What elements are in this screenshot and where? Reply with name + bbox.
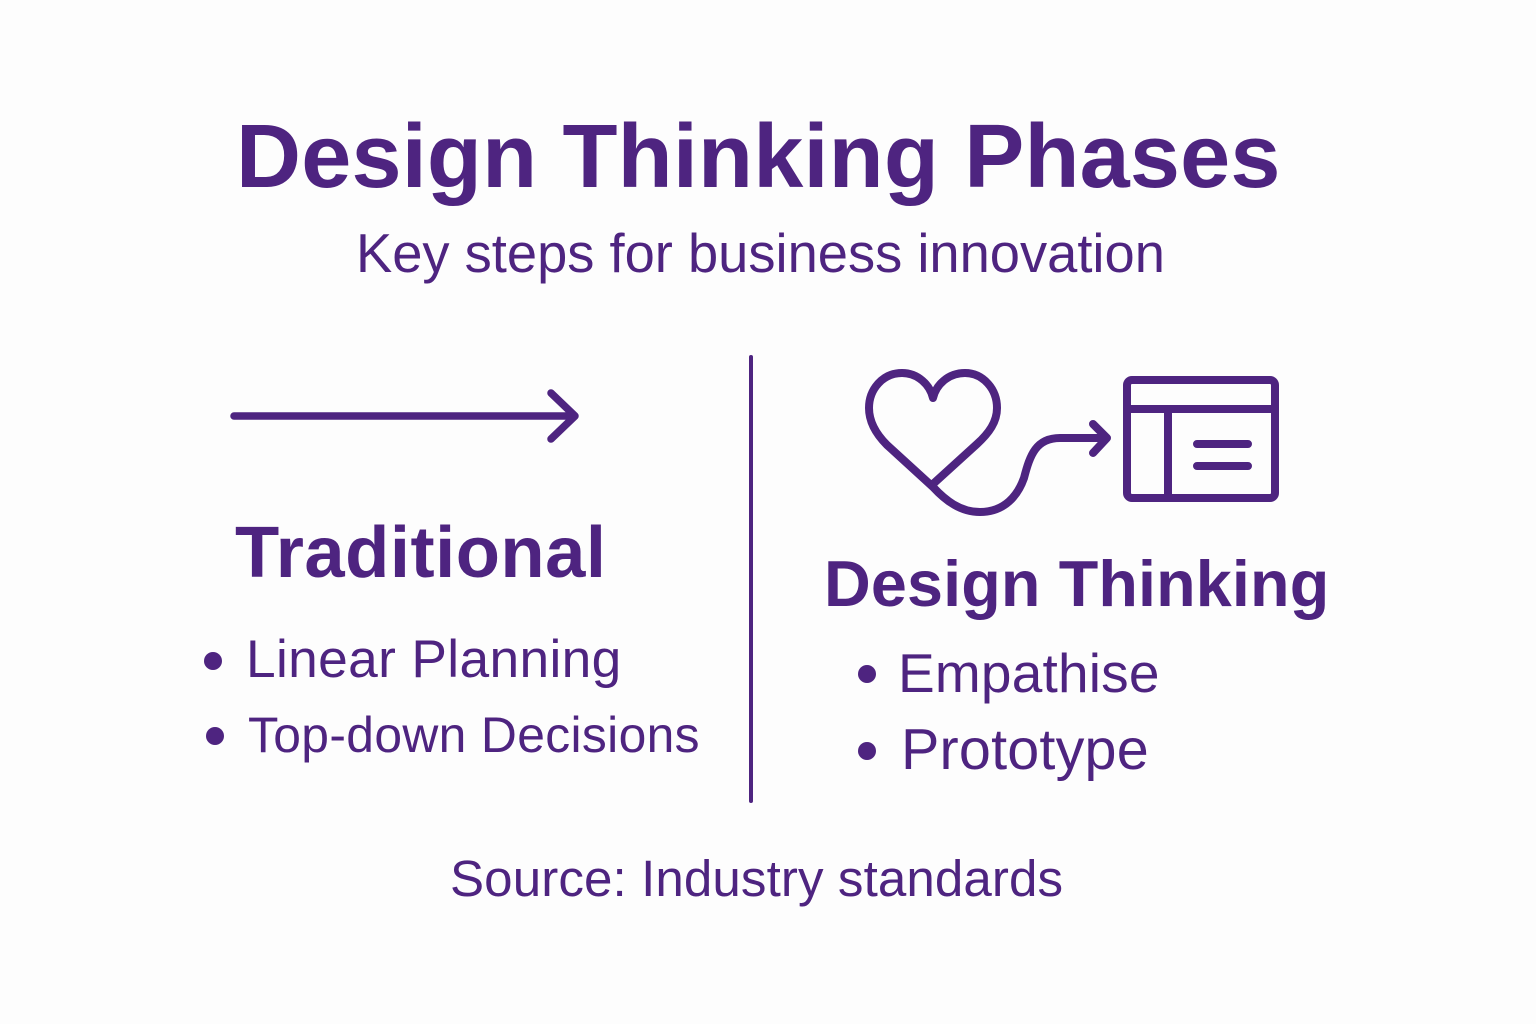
wireframe window: [1127, 380, 1275, 498]
icon: heart to prototype: [865, 369, 1279, 516]
bullet: prototype: Prototype: [901, 718, 1149, 782]
subtitle: Key steps for business innovation: [356, 223, 1165, 284]
bullet: top-down decisions: Top-down Decisions: [248, 707, 700, 763]
list: design thinking: [858, 642, 1160, 782]
heading: design thinking: Design Thinking: [824, 547, 1329, 620]
heart and path: [869, 373, 1107, 512]
icon: linear arrow: [230, 389, 579, 443]
title: Design Thinking Phases: [236, 107, 1281, 207]
bullet: empathise: Empathise: [898, 642, 1160, 704]
source: Source: Industry standards: [450, 850, 1063, 907]
center divider: [749, 355, 753, 803]
bullet: linear planning: Linear Planning: [246, 630, 622, 689]
list: traditional: [204, 630, 700, 763]
heading: traditional: Traditional: [235, 512, 607, 593]
